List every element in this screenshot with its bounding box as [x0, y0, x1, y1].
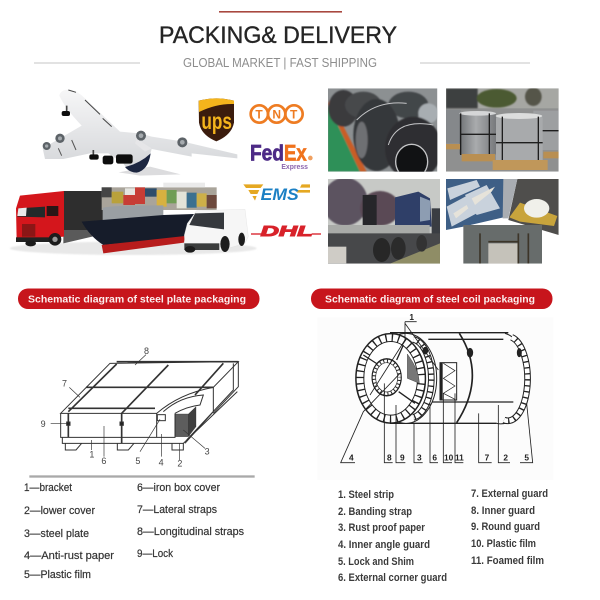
icon: FedEx logo — [250, 140, 313, 171]
chart: steel plate diagram: 3 — [205, 447, 210, 457]
icon: red truck — [16, 191, 103, 246]
icon: TNT logo: T — [290, 107, 298, 121]
icon: FedEx logo: Fed — [250, 140, 284, 165]
panel: coil legend: 2. Banding strap — [338, 506, 412, 518]
chart: steel plate diagram: 8 — [144, 346, 149, 356]
photo: black coils in warehouse — [328, 88, 442, 180]
photo: coils in container — [446, 179, 559, 264]
panel: coil legend — [338, 488, 548, 584]
chart: steel coil diagram: 9 — [400, 453, 405, 463]
heading: steel coil packaging pill — [311, 288, 552, 309]
panel: plate legend: 3—steel plate — [24, 528, 89, 540]
panel: plate legend: 9—Lock — [137, 548, 173, 560]
panel: coil legend: 3. Rust proof paper — [338, 522, 426, 534]
panel: coil legend: 6. External corner guard — [338, 572, 447, 584]
chart: steel coil diagram: 7 — [485, 453, 490, 463]
chart: steel plate diagram: 4 — [159, 457, 164, 467]
chart: steel coil diagram: 5 — [524, 453, 529, 463]
icon: EMS logo — [243, 184, 310, 204]
panel: coil legend: 5. Lock and Shim — [338, 556, 414, 568]
panel: steel coil photos — [322, 87, 559, 264]
banding strap — [457, 333, 472, 423]
chart: steel coil diagram: 2 — [503, 453, 508, 463]
panel: plate legend — [24, 482, 244, 581]
photo: coils on truck — [322, 178, 440, 264]
icon: EMS logo: EMS — [261, 185, 299, 204]
heading: steel plate packaging pill — [18, 288, 260, 309]
panel: coil legend: 4. Inner angle guard — [338, 539, 430, 551]
photo: wrapped coils on pallets — [446, 87, 559, 172]
panel: transport collage — [10, 98, 321, 255]
panel: plate legend: 2—lower cover — [24, 505, 95, 517]
chart: steel coil diagram: 4 — [349, 453, 354, 463]
chart: steel coil diagram: 1 — [409, 312, 414, 322]
right end guard — [497, 333, 528, 424]
chart: steel coil diagram — [317, 312, 553, 480]
panel: plate legend: 6—iron box cover — [137, 482, 220, 494]
chart: steel plate diagram: 6 — [101, 456, 106, 466]
panel: coil legend: 7. External guard — [471, 488, 548, 500]
icon: TNT logo: T — [255, 107, 263, 121]
panel: coil legend: 10. Plastic film — [471, 538, 536, 550]
panel: plate legend: 8—Longitudinal straps — [137, 526, 244, 538]
chart: steel coil diagram: 10 — [444, 453, 454, 463]
chart: steel plate diagram: 1 — [89, 450, 94, 460]
chart: steel coil diagram: 3 — [417, 453, 422, 463]
front flange — [356, 333, 426, 423]
title: header group — [34, 11, 530, 70]
chart: steel coil diagram: 8 — [387, 453, 392, 463]
chart: steel plate diagram: 5 — [135, 456, 140, 466]
icon: UPS logo: ups — [201, 108, 232, 134]
chart: steel plate diagram: 9 — [41, 419, 46, 429]
panel: plate legend: 4—Anti-rust paper — [24, 550, 114, 562]
icon: FedEx logo: Express — [281, 164, 308, 171]
icon: DHL logo — [251, 224, 321, 240]
icon: container ship — [82, 183, 217, 253]
heading: steel plate packaging pill: Schematic diagram of steel plate packaging — [28, 294, 246, 306]
panel: coil legend: 1. Steel strip — [338, 489, 394, 501]
chart: steel plate diagram: 2 — [177, 459, 182, 469]
chart: steel coil diagram: 11 — [455, 453, 464, 463]
subtitle: GLOBAL MARKET | FAST SHIPPING — [183, 56, 377, 70]
icon: UPS logo — [199, 98, 234, 141]
icon: FedEx logo: Ex — [284, 140, 307, 165]
chart: steel plate diagram — [29, 346, 255, 478]
icon: TNT logo — [251, 105, 303, 123]
icon: white van — [184, 209, 248, 253]
panel: plate legend: 1—bracket — [24, 482, 72, 494]
outer corner guard — [375, 333, 437, 423]
panel: coil legend: 8. Inner guard — [471, 505, 535, 517]
chart: steel coil diagram: 6 — [432, 453, 437, 463]
panel: plate legend: 7—Lateral straps — [137, 504, 217, 516]
panel: plate legend: 5—Plastic film — [24, 569, 91, 581]
heading: packing and delivery: PACKING& DELIVERY — [159, 22, 397, 49]
panel: coil legend: 9. Round guard — [471, 521, 540, 533]
chart: steel plate diagram: 7 — [62, 379, 67, 389]
icon: TNT logo: N — [272, 107, 281, 121]
icon: airplane — [43, 90, 237, 176]
panel: coil legend: 11. Foamed film — [471, 555, 544, 567]
heading: steel coil packaging pill: Schematic diagram of steel coil packaging — [325, 294, 535, 306]
icon: DHL logo: DHL — [261, 224, 313, 240]
